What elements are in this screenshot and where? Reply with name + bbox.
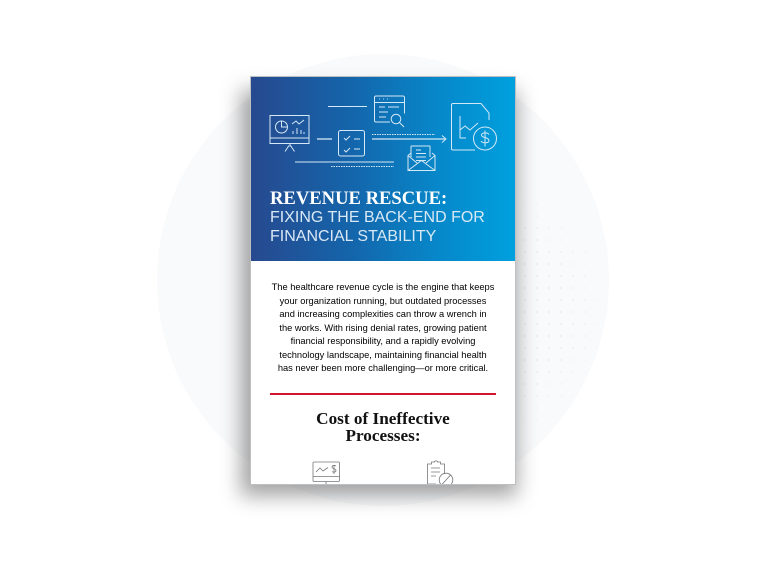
header illustration (270, 96, 497, 171)
heading line 2: FIXING THE BACK-END FOR (270, 208, 485, 226)
intro paragraph: has never been more challenging—or more critical. (278, 363, 488, 373)
heading line 1: REVENUE RESCUE: (270, 188, 447, 209)
header banner (251, 77, 515, 261)
heading (270, 188, 485, 244)
heading line 3: FINANCIAL STABILITY (270, 228, 436, 244)
background circle with dots (222, 72, 598, 509)
flow arrow (372, 134, 446, 142)
icon: presentation monitor (270, 116, 309, 152)
document card (250, 76, 516, 485)
icon: monitor with dollar (313, 462, 340, 484)
icon: financial document (452, 104, 496, 150)
intro paragraph: The healthcare revenue cycle is the engine that keeps (272, 282, 494, 292)
lower lines (295, 162, 394, 166)
section heading: Processes: (345, 426, 421, 445)
section heading: Cost of Ineffective (316, 409, 450, 428)
intro paragraph: the works. With rising denial rates, growing patient (279, 322, 487, 332)
red divider (270, 393, 496, 395)
icon: envelope (408, 146, 435, 170)
intro paragraph: your organization running, but outdated processes (280, 296, 486, 306)
icon: checklist (338, 130, 364, 156)
intro paragraph: technology landscape, maintaining financial health (279, 350, 487, 360)
icon: clipboard with prohibition (428, 461, 453, 487)
bottom icons (312, 460, 454, 484)
connector line (317, 138, 332, 140)
intro paragraph (272, 282, 494, 373)
icon: search window (374, 96, 404, 127)
section heading (316, 409, 450, 445)
intro paragraph: and increasing complexities can throw a wrench in (279, 309, 487, 319)
intro paragraph: financial responsibility, and a rapidly evolving (291, 336, 475, 346)
top line (328, 106, 367, 108)
